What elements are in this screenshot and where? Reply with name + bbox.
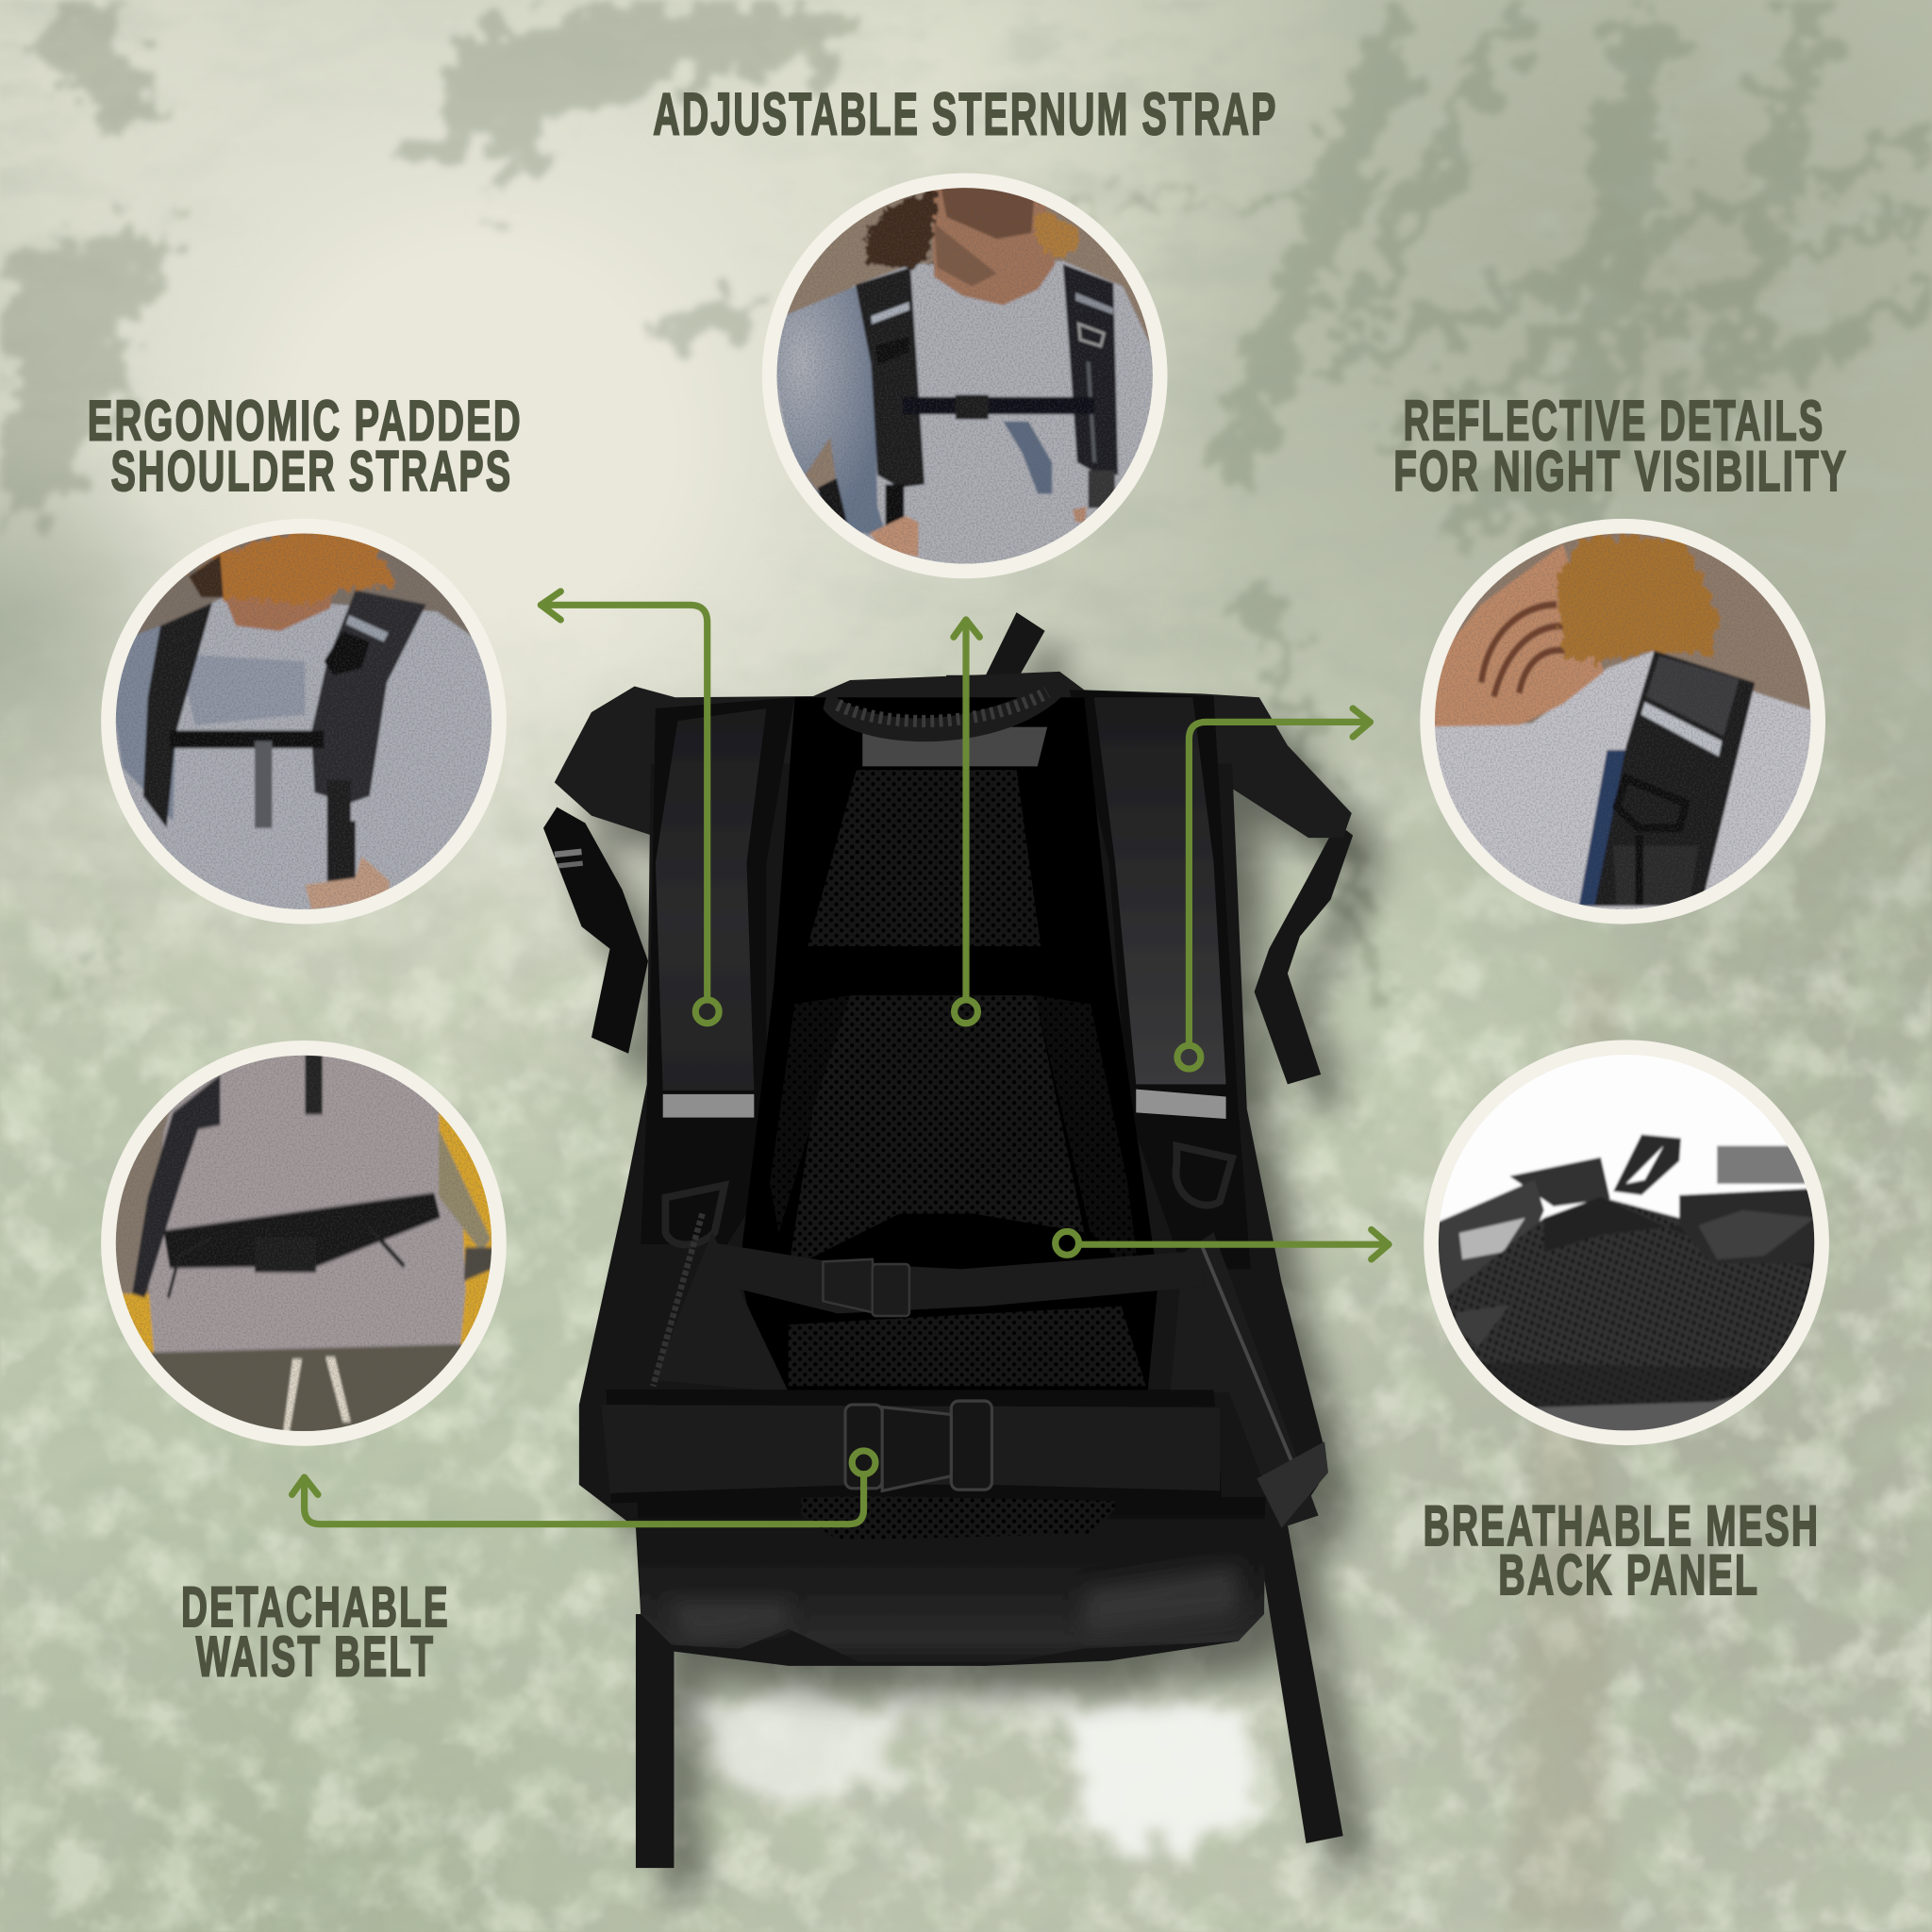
waist belt buckle bbox=[845, 1401, 991, 1491]
main body bbox=[579, 764, 1325, 1666]
top grab strap bbox=[946, 612, 1045, 696]
arrow: waist belt bbox=[292, 1451, 875, 1524]
mesh panels bbox=[770, 770, 1146, 1541]
heading: waist belt: WAIST BELT bbox=[196, 1624, 435, 1688]
photo ring: sternum strap bbox=[762, 174, 1174, 578]
foliage texture bbox=[2, 2, 1365, 1049]
neck pad bbox=[823, 675, 1062, 741]
shadow band around waist belt bbox=[607, 1390, 1223, 1503]
base panel bbox=[637, 1497, 1265, 1666]
arrow: mesh back panel bbox=[1056, 1230, 1389, 1259]
bright water patch bbox=[690, 1690, 1269, 1860]
right compression strap bbox=[1255, 823, 1353, 1084]
waist belt bbox=[601, 1405, 1220, 1493]
heading: shoulder straps: ERGONOMIC PADDED bbox=[88, 389, 523, 452]
cross band bbox=[791, 946, 1087, 993]
bottom straps bbox=[636, 1516, 1343, 1868]
base highlights bbox=[665, 1565, 1239, 1639]
left shoulder panel bbox=[641, 697, 794, 1244]
arrow: sternum strap bbox=[954, 620, 979, 1024]
tree silhouettes bbox=[0, 0, 1923, 1059]
sternum strap bbox=[708, 1242, 1205, 1313]
photo ring: mesh panel bbox=[1422, 1040, 1830, 1445]
photo ring: shoulder straps bbox=[101, 519, 512, 924]
reflective strips bbox=[663, 1094, 754, 1118]
panel: detachable waist belt bbox=[101, 1041, 509, 1688]
backpack bbox=[543, 612, 1353, 1868]
arrow: shoulder straps bbox=[541, 591, 719, 1024]
left compression strap bbox=[543, 808, 648, 1054]
photo ring: reflective details bbox=[1419, 519, 1827, 924]
top label patch bbox=[862, 727, 1047, 766]
heading: sternum strap: ADJUSTABLE STERNUM STRAP bbox=[653, 81, 1277, 147]
D-rings bbox=[665, 1146, 1232, 1244]
heading: mesh panel: BACK PANEL bbox=[1498, 1543, 1759, 1607]
heading: reflective details bbox=[1393, 389, 1848, 503]
panel: ergonomic padded shoulder straps bbox=[88, 389, 523, 924]
panel: adjustable sternum strap bbox=[653, 81, 1277, 578]
callout arrows bbox=[292, 591, 1389, 1524]
photo ring: waist belt bbox=[101, 1041, 509, 1446]
arrow: reflective details bbox=[1177, 708, 1370, 1069]
heading: mesh panel bbox=[1424, 1494, 1820, 1607]
panel: reflective details bbox=[1393, 389, 1848, 924]
sternum buckle bbox=[823, 1259, 909, 1316]
heading: shoulder straps bbox=[88, 389, 523, 503]
tree trunk bbox=[1506, 974, 1621, 1932]
roll top bbox=[555, 672, 1352, 838]
heading: waist belt: DETACHABLE bbox=[181, 1575, 450, 1639]
center back bbox=[740, 697, 1158, 1411]
right shoulder panel bbox=[1070, 690, 1251, 1269]
side panel highlights bbox=[653, 1232, 789, 1392]
heading: waist belt bbox=[181, 1575, 450, 1688]
heading: shoulder straps: SHOULDER STRAPS bbox=[111, 440, 512, 503]
panel: breathable mesh back panel bbox=[1422, 1040, 1830, 1607]
